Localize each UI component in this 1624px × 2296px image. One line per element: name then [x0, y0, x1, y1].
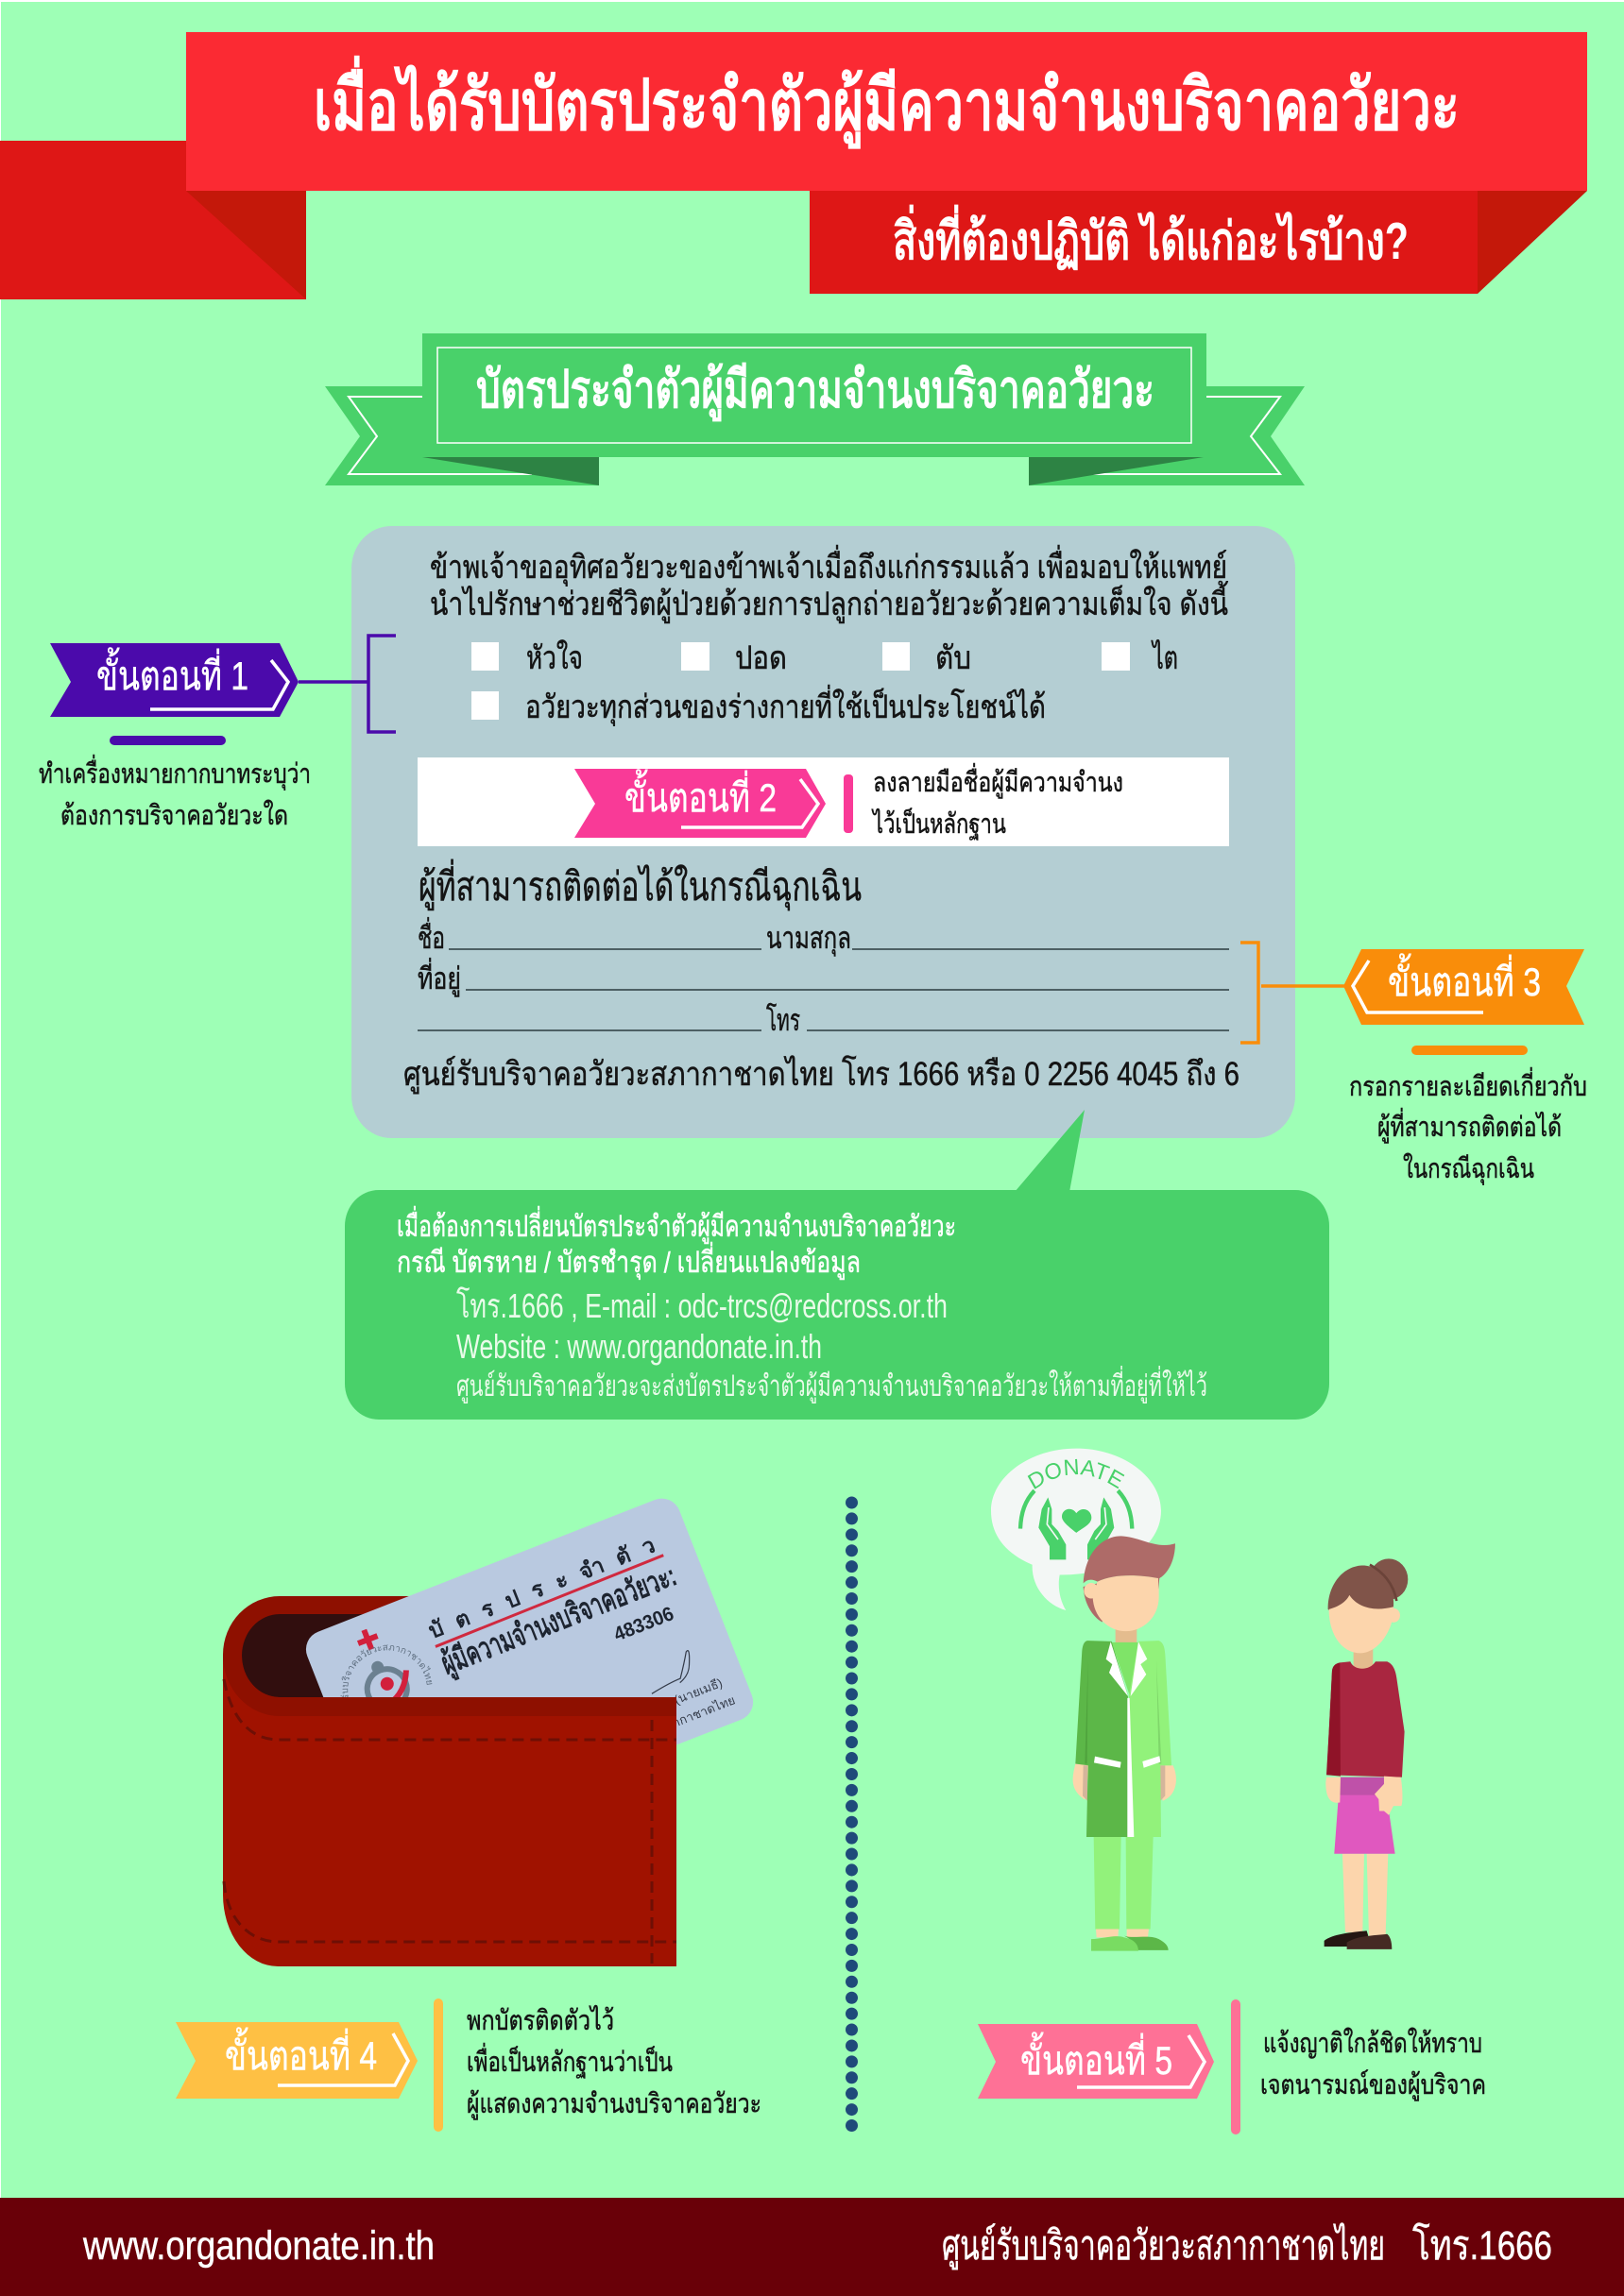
- wallet with donor card: [223, 1498, 754, 1966]
- emergency contact form: โทร: [766, 1003, 800, 1037]
- contact centre line: ศูนย์รับบริจาคอวัยวะสภากาชาดไทย โทร 1666 หรือ 0 2256 4045 ถึง 6: [403, 1055, 1239, 1094]
- speech bubble: card replacement info: ศูนย์รับบริจาคอวัยวะจะส่งบัตรประจำตัวผู้มีความจำนงบริจาคอวัยวะให้ตามที่อยู่ที่ให้ไว้: [456, 1366, 1207, 1403]
- step 3 description: ในกรณีฉุกเฉิน: [1403, 1152, 1534, 1185]
- donor card: 483306: [611, 1603, 676, 1646]
- bracket and connector: [299, 636, 396, 732]
- speech bubble: card replacement info: Website : www.organdonate.in.th: [456, 1327, 822, 1366]
- step 3 description: ผู้ที่สามารถติดต่อได้: [1377, 1108, 1562, 1144]
- step 5 description: เจตนารมณ์ของผู้บริจาค: [1260, 2069, 1486, 2101]
- organ checkboxes: ไต: [1151, 639, 1178, 676]
- wallet front: [223, 1655, 676, 1966]
- step 3 badge: [1343, 949, 1584, 1025]
- step 4 description: [467, 2004, 761, 2120]
- step 3 callout: [1240, 943, 1587, 1185]
- pledge text: ข้าพเจ้าขออุทิศอวัยวะของข้าพเจ้าเมื่อถึงแก่กรรมแล้ว เพื่อมอบให้แพทย์: [430, 545, 1227, 587]
- step 1 description: [39, 755, 311, 831]
- step 4 badge: [176, 2022, 418, 2099]
- footer bar: www.organdonate.in.th: [82, 2223, 435, 2269]
- step 3 badge: ขั้นตอนที่ 3: [1388, 953, 1541, 1004]
- panel: donation card form: [351, 526, 1295, 1138]
- speech bubble: card replacement info: [345, 1110, 1329, 1420]
- subtitle ribbon: [810, 191, 1587, 294]
- step 3 description: [1349, 1067, 1587, 1185]
- step 5 callout: [978, 1999, 1486, 2134]
- speech bubble: card replacement info: เมื่อต้องการเปลี่ยนบัตรประจำตัวผู้มีความจำนงบริจาคอวัยวะ: [397, 1206, 956, 1244]
- signature strip with step 2: [418, 757, 1229, 846]
- step 5 badge: ขั้นตอนที่ 5: [1020, 2032, 1172, 2083]
- step 5 badge: [978, 2024, 1214, 2099]
- organ checkboxes: ปอด: [735, 640, 787, 676]
- step 1 callout: [39, 636, 396, 831]
- pledge text: นำไปรักษาช่วยชีวิตผู้ป่วยด้วยการปลูกถ่ายอวัยวะด้วยความเต็มใจ ดังนี้: [430, 581, 1229, 623]
- step 5 description: [1260, 2027, 1486, 2101]
- subtitle ribbon: สิ่งที่ต้องปฏิบัติ ได้แก่อะไรบ้าง?: [893, 204, 1409, 270]
- step 1 description: ต้องการบริจาคอวัยวะใด: [60, 799, 288, 831]
- speech bubble with donate icon: [991, 1449, 1161, 1610]
- step 4 callout: [176, 1998, 761, 2132]
- signature strip with step 2: ไว้เป็นหลักฐาน: [871, 807, 1006, 841]
- step 2 badge: ขั้นตอนที่ 2: [624, 769, 777, 820]
- footer bar: โทร.1666: [1412, 2222, 1552, 2269]
- green card-title ribbon: [325, 333, 1305, 485]
- emergency contact form: [418, 859, 1229, 1037]
- organ checkboxes: หัวใจ: [526, 639, 583, 676]
- bracket and connector: [1240, 943, 1346, 1043]
- stitching: [224, 1679, 676, 1964]
- emergency contact form: ที่อยู่: [418, 958, 461, 997]
- step 1 description: ทำเครื่องหมายกากบาทระบุว่า: [39, 755, 311, 791]
- emergency contact form: ผู้ที่สามารถติดต่อได้ในกรณีฉุกเฉิน: [419, 859, 862, 911]
- donor card: (นายเมธี): [672, 1675, 725, 1707]
- donor card: บัตรประจำตัว: [425, 1532, 658, 1643]
- wallet back: [223, 1596, 605, 1716]
- step 2 badge: [574, 769, 826, 838]
- left ribbon tail: [0, 141, 306, 299]
- signature strip with step 2: ลงลายมือชื่อผู้มีความจำนง: [873, 763, 1123, 799]
- man: [1073, 1536, 1176, 1951]
- organ checkboxes: อวัยวะทุกส่วนของร่างกายที่ใช้เป็นประโยชน์ได้: [525, 685, 1046, 726]
- donor card: [306, 1498, 754, 1745]
- pledge text: [430, 545, 1229, 623]
- step 4 description: พกบัตรติดตัวไว้: [467, 2004, 614, 2036]
- emergency contact form: นามสกุล: [766, 921, 851, 957]
- footer bar: [0, 2198, 1624, 2296]
- green card-title ribbon: บัตรประจำตัวผู้มีความจำนงบริจาคอวัยวะ: [476, 360, 1154, 422]
- dotted divider: [846, 1503, 858, 2126]
- speech bubble: card replacement info: โทร.1666 , E-mail : odc-trcs@redcross.or.th: [456, 1286, 948, 1325]
- emergency contact form: ชื่อ: [418, 917, 445, 955]
- footer bar: ศูนย์รับบริจาคอวัยวะสภากาชาดไทย: [942, 2222, 1385, 2270]
- step 4 badge: ขั้นตอนที่ 4: [225, 2027, 377, 2078]
- main title banner: [186, 32, 1587, 191]
- woman: [1325, 1558, 1408, 1949]
- step 1 badge: [50, 643, 299, 717]
- donor card: ศูนย์รับบริจาคอวัยวะสภากาชาดไทย: [340, 1644, 433, 1697]
- header ribbon: [0, 32, 1587, 299]
- speech bubble: card replacement info: กรณี บัตรหาย / บัตรชำรุด / เปลี่ยนแปลงข้อมูล: [397, 1242, 861, 1281]
- donor card: สภากาชาดไทย: [656, 1692, 737, 1736]
- step 4 description: เพื่อเป็นหลักฐานว่าเป็น: [467, 2043, 673, 2079]
- donor card: ผู้มีความจำนงบริจาคอวัยวะ:: [436, 1557, 682, 1684]
- organ checkboxes: ตับ: [935, 640, 971, 676]
- speech bubble with donate icon: DONATE: [1028, 1458, 1124, 1489]
- illustration: donor figures: [991, 1449, 1408, 1951]
- organ checkboxes: [471, 639, 1178, 726]
- step 5 description: แจ้งญาติใกล้ชิดให้ทราบ: [1263, 2027, 1482, 2059]
- step 1 badge: ขั้นตอนที่ 1: [96, 647, 248, 698]
- step 4 description: ผู้แสดงความจำนงบริจาคอวัยวะ: [467, 2089, 761, 2120]
